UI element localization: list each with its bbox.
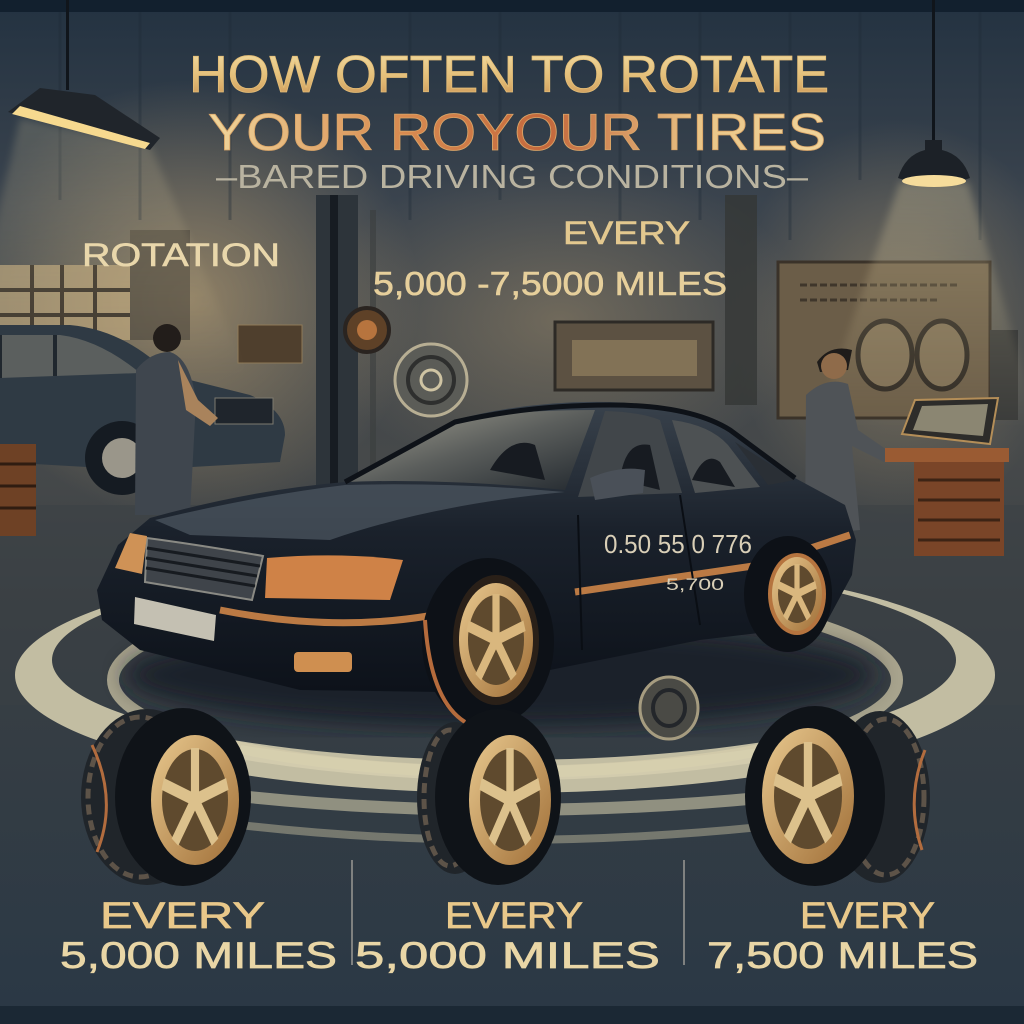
label: every 5,000 miles left (60, 895, 337, 976)
label: every 7,500 miles right (707, 895, 978, 976)
car body (97, 402, 856, 692)
title: HOW OFTEN TO ROTATE (189, 46, 829, 104)
title: YOUR ROYOUR TIRES (208, 104, 826, 162)
small tire icon on floor (640, 677, 698, 739)
label: every 5,000-7,500 miles: 5,000 -7,5000 MILES (373, 265, 727, 302)
label: every 5,000 miles center: 5,000 MILES (355, 935, 660, 976)
label: every 5,000 miles center: EVERY (445, 895, 583, 936)
door numbers (604, 529, 752, 594)
hood highlight (155, 484, 565, 540)
door numbers: 5,700 (666, 575, 724, 594)
label: every 5,000-7,500 miles: EVERY (563, 215, 690, 251)
license plate (134, 597, 216, 641)
person: left mechanic (135, 324, 218, 515)
windows (345, 405, 795, 497)
front wheel (422, 558, 554, 726)
background car (0, 325, 285, 495)
label: every 5,000 miles left: 5,000 MILES (60, 935, 337, 976)
workstation desk and monitor (885, 398, 1009, 556)
mirror (590, 469, 645, 500)
title (189, 46, 829, 162)
tire: right (745, 706, 930, 886)
label: every 7,500 miles right: EVERY (800, 895, 935, 936)
tire: center (417, 709, 561, 885)
tire: left (81, 708, 251, 886)
floor rotation rings (15, 557, 995, 840)
column dividers (352, 860, 684, 965)
subtitle: –BARED DRIVING CONDITIONS– (216, 158, 809, 195)
storage cabinet (0, 444, 36, 536)
small gauge icons (345, 308, 467, 416)
main car (97, 402, 856, 726)
label: every 5,000 miles left: EVERY (100, 895, 265, 936)
door numbers: 0.50 55 0 776 (604, 529, 752, 559)
label: every 5,000-7,500 miles (373, 215, 727, 302)
lamp: left (0, 0, 250, 380)
label: every 7,500 miles right: 7,500 MILES (707, 935, 978, 976)
lamp: right (815, 0, 1024, 430)
trim stripe (220, 535, 850, 623)
car shadow (125, 623, 875, 727)
garage interior (0, 195, 1018, 485)
label: rotation: ROTATION (82, 237, 280, 273)
person: right mechanic (805, 348, 890, 535)
headlights (265, 555, 403, 600)
rear wheel (744, 536, 832, 652)
grille (145, 538, 263, 600)
label: every 5,000 miles center (355, 895, 660, 976)
